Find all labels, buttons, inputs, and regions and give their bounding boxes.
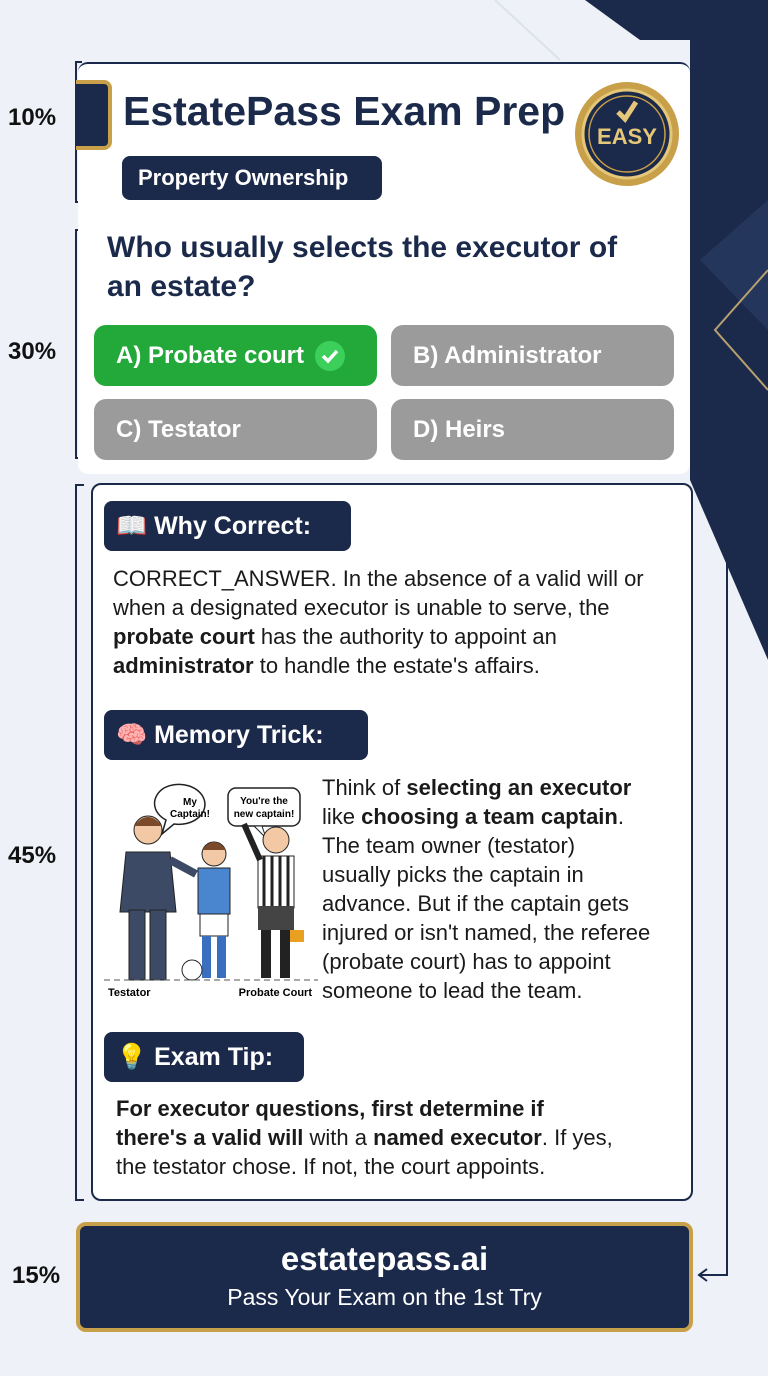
option B: B) Administrator xyxy=(413,342,601,368)
exam tip text: the testator chose. If not, the court appoints. xyxy=(116,1154,545,1179)
option D xyxy=(391,399,674,460)
title: EstatePass Exam Prep xyxy=(123,88,565,134)
why correct text: CORRECT_ANSWER. In the absence of a valid will or xyxy=(113,566,644,591)
explanation panel xyxy=(91,483,693,1201)
header tab xyxy=(76,80,112,150)
question: an estate? xyxy=(107,270,255,303)
option C: C) Testator xyxy=(116,416,241,442)
memory trick text: usually picks the captain in xyxy=(322,862,584,887)
memory trick heading: 🧠 Memory Trick: xyxy=(116,720,324,748)
badge: easy xyxy=(575,82,679,186)
memory trick text: injured or isn't named, the referee xyxy=(322,920,650,945)
memory trick text xyxy=(322,775,650,1003)
memory trick text: (probate court) has to appoint xyxy=(322,949,611,974)
memory trick text: advance. But if the captain gets xyxy=(322,891,629,916)
option B xyxy=(391,325,674,386)
exam tip heading: 💡 Exam Tip: xyxy=(116,1042,273,1070)
exam tip text xyxy=(116,1096,613,1179)
illustration: captain: Captain! xyxy=(170,809,210,820)
illustration: captain: My xyxy=(183,797,197,808)
why correct text: probate court has the authority to appoint an xyxy=(113,624,557,649)
brackets xyxy=(75,61,84,1201)
main card xyxy=(78,62,690,474)
exam tip text: For executor questions, first determine if xyxy=(116,1096,544,1121)
illustration: captain: new captain! xyxy=(234,809,294,820)
question xyxy=(107,231,618,303)
exam tip heading xyxy=(104,1032,304,1082)
option A: A) Probate court xyxy=(116,342,304,368)
illustration: captain: Probate Court xyxy=(239,987,312,999)
illustration: captain xyxy=(104,784,318,999)
memory trick text: The team owner (testator) xyxy=(322,833,575,858)
question: Who usually selects the executor of xyxy=(107,231,617,264)
why correct text: when a designated executor is unable to serve, the xyxy=(113,595,610,620)
label 15%: 15% xyxy=(12,1262,60,1289)
why correct heading xyxy=(104,501,351,551)
option A xyxy=(94,325,377,386)
footer banner xyxy=(76,1222,693,1332)
memory trick text: like choosing a team captain. xyxy=(322,804,624,829)
label 10%: 10% xyxy=(8,104,56,131)
memory trick heading xyxy=(104,710,368,760)
right connector arrow xyxy=(697,563,728,1282)
option D: D) Heirs xyxy=(413,416,505,442)
label 30%: 30% xyxy=(8,338,56,365)
option C xyxy=(94,399,377,460)
why correct heading: 📖 Why Correct: xyxy=(116,512,311,540)
memory trick text: Think of selecting an executor xyxy=(322,775,631,800)
exam tip text: there's a valid will with a named executor. If yes, xyxy=(116,1125,613,1150)
illustration: captain: Testator xyxy=(108,987,151,999)
badge: easy: EASY xyxy=(597,124,657,149)
illustration: captain: You're the xyxy=(240,796,288,807)
why correct text: administrator to handle the estate's affairs. xyxy=(113,653,540,678)
why correct text xyxy=(113,566,644,678)
label 45%: 45% xyxy=(8,842,56,869)
memory trick text: someone to lead the team. xyxy=(322,978,582,1003)
footer banner: estatepass.ai xyxy=(281,1240,488,1277)
topic pill xyxy=(122,156,382,200)
topic pill: Property Ownership xyxy=(138,165,348,190)
footer banner: Pass Your Exam on the 1st Try xyxy=(227,1284,542,1310)
